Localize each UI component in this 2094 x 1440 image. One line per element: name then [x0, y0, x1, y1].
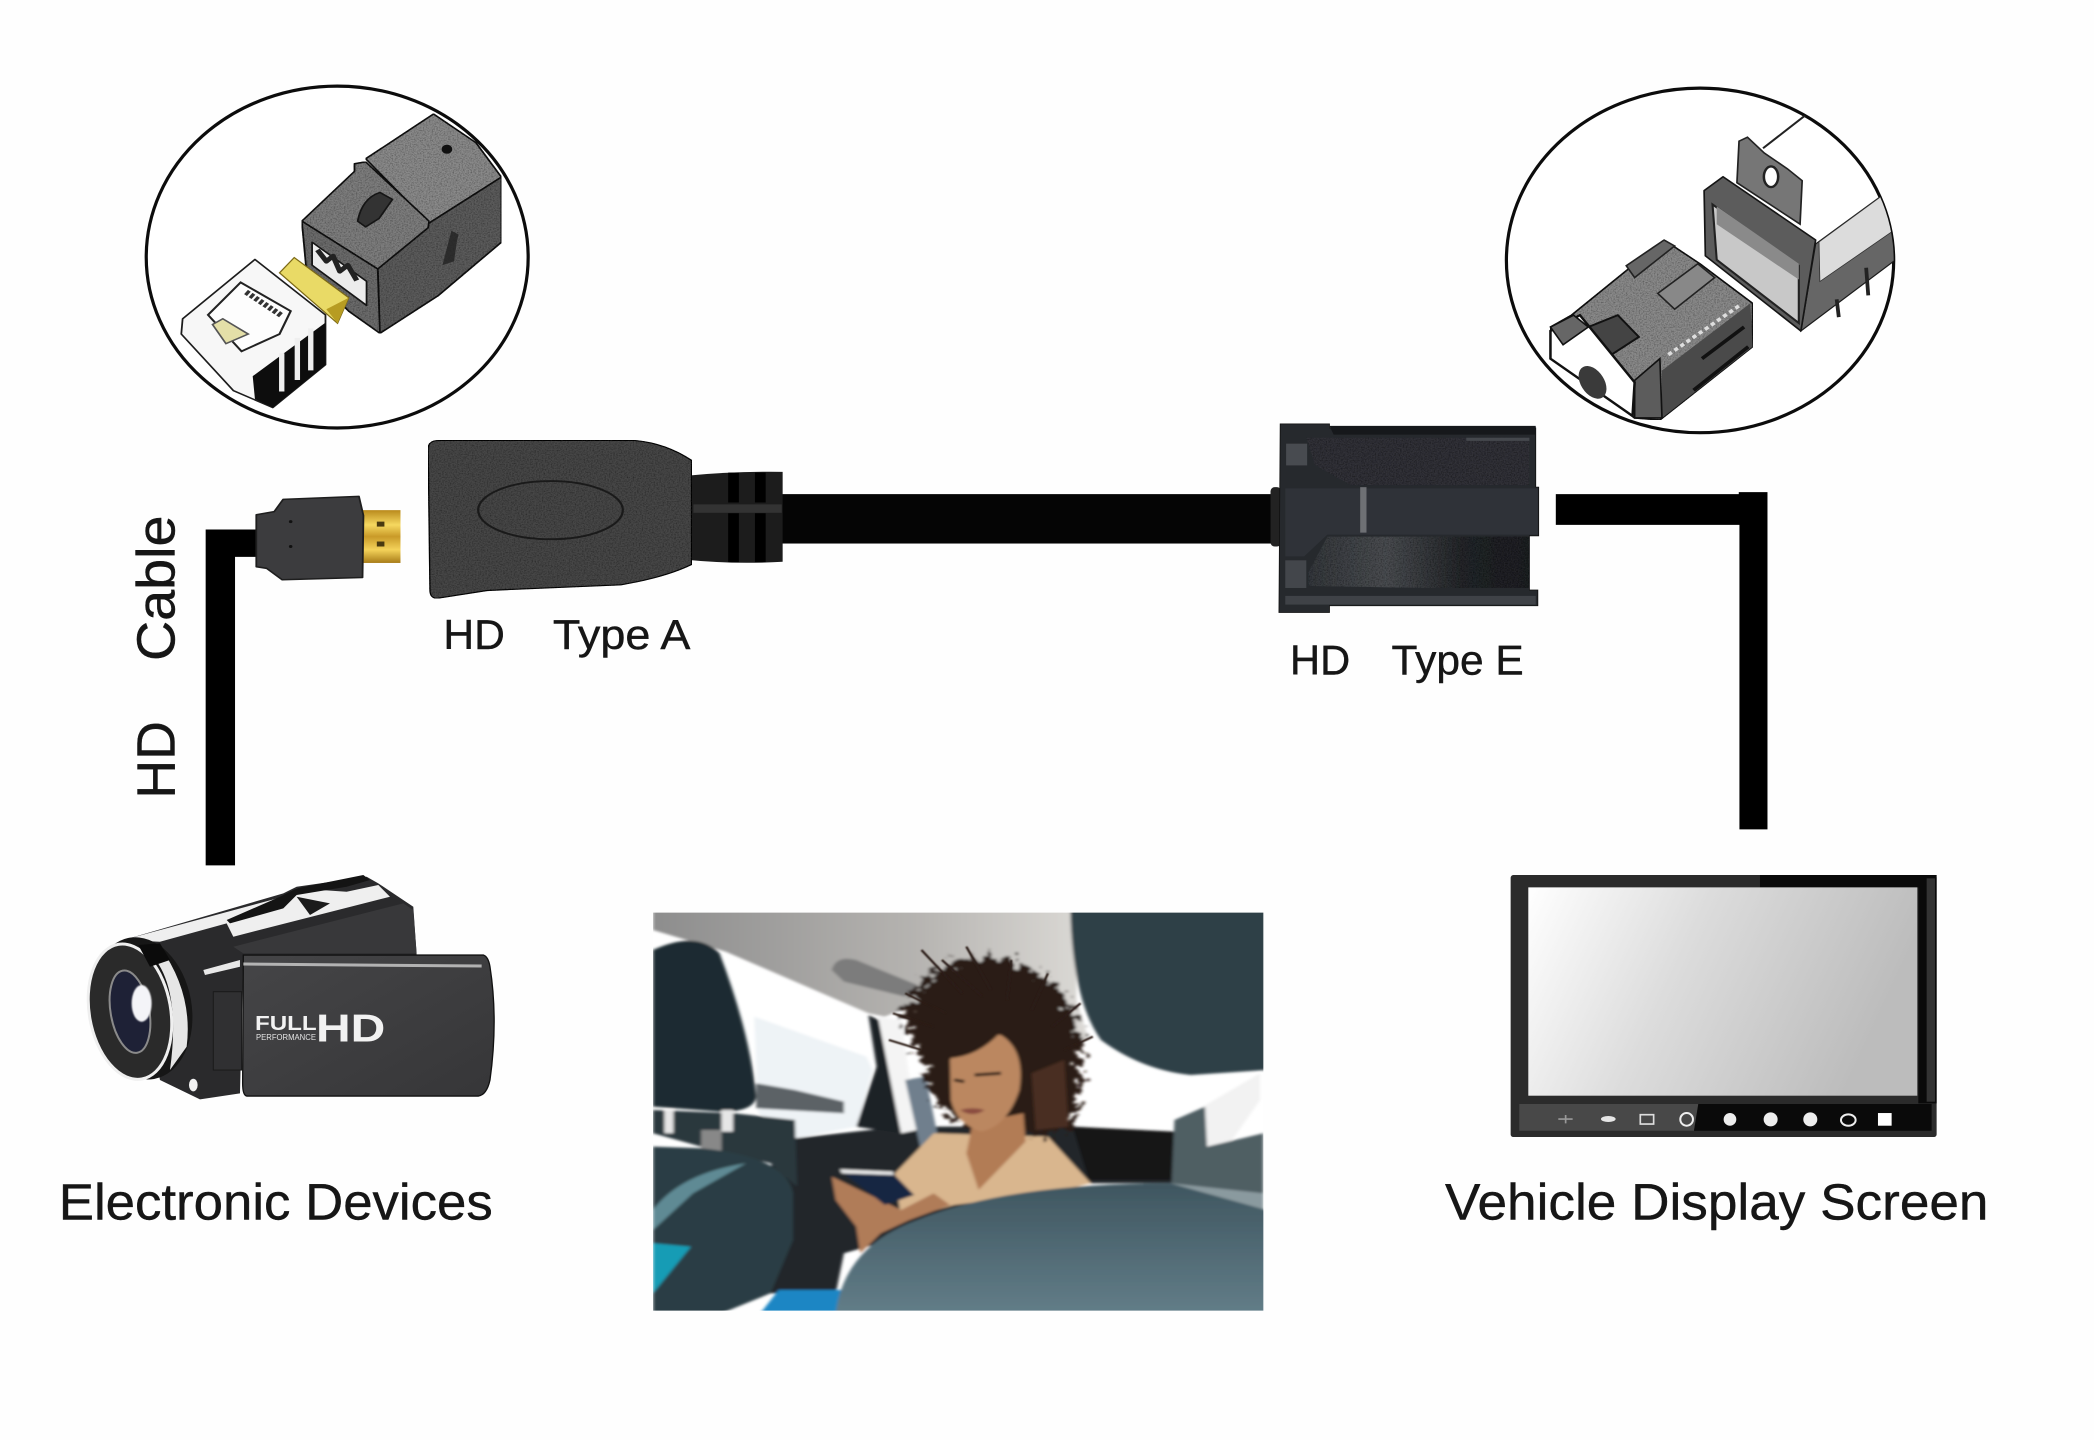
- center bar: [1285, 488, 1538, 556]
- label: HD Cable (vertical): Cable: [127, 515, 186, 661]
- ceiling: [653, 910, 1089, 1043]
- FULL HD badge: HD: [316, 1007, 385, 1051]
- label: HD Cable (vertical): [127, 515, 186, 799]
- label: Vehicle Display Screen: Vehicle Display Screen: [1445, 1173, 1988, 1230]
- left seat back: [653, 1147, 793, 1313]
- gold plug tongue: [279, 258, 349, 323]
- screen: [1528, 887, 1917, 1096]
- neck and chest: [966, 1113, 1025, 1190]
- plug body: [1550, 240, 1753, 420]
- window tint: [754, 1017, 873, 1138]
- front seat: [836, 1183, 1266, 1313]
- face: [950, 1035, 1021, 1132]
- seat belt: [904, 1075, 940, 1148]
- cable: main black cable: [775, 494, 1285, 544]
- label: HD Type E: HD: [1290, 637, 1350, 683]
- headrest posts: [653, 1110, 797, 1187]
- cable: left L-shaped black line: [206, 530, 262, 865]
- shirt: [895, 1133, 1091, 1220]
- metal tab with hole: [1737, 137, 1802, 224]
- corner blocks: [1286, 444, 1307, 465]
- label: HD Type A: [443, 611, 690, 658]
- circle detail: HD Type A connector: [146, 86, 528, 428]
- cable: right L-shaped black line: [1556, 492, 1767, 829]
- arms and hands: [832, 1177, 950, 1253]
- thin wire: [1763, 115, 1805, 148]
- flip screen panel: [243, 955, 494, 1096]
- label: Electronic Devices: Electronic Devices: [59, 1173, 493, 1230]
- vehicle display monitor: [1511, 875, 1937, 1137]
- control bar: [1519, 1104, 1932, 1131]
- HD Type E connector: [1271, 424, 1539, 613]
- hair strands: [889, 947, 1093, 1050]
- upper panel: [1306, 438, 1529, 485]
- label: HD Cable (vertical): HD: [127, 721, 186, 799]
- strain relief: [688, 472, 783, 563]
- label: HD Type A: HD: [443, 611, 505, 658]
- phone: [842, 1172, 914, 1205]
- cable collar: [1271, 487, 1281, 546]
- top body: [123, 877, 417, 1099]
- label: HD Type E: Type E: [1392, 637, 1524, 683]
- female socket housing: [302, 114, 501, 333]
- label: HD Type A: Type A: [553, 611, 690, 658]
- housing outline: [1279, 424, 1539, 613]
- HD Type A socket connector: [428, 440, 783, 598]
- label: HD Type E: [1290, 637, 1524, 683]
- gold contact: [363, 510, 400, 563]
- camcorder: Electronic Devices icon: [78, 875, 494, 1099]
- hair: [901, 957, 1081, 1133]
- circle detail: HD Type E connector: [1506, 88, 1900, 433]
- photo: woman using phone in car back seat: [653, 910, 1266, 1313]
- FULL HD badge: PERFORMANCE: [256, 1033, 316, 1042]
- right rear post highlight: [1203, 1073, 1260, 1150]
- white plug body: [181, 259, 325, 408]
- grab handle: [832, 959, 917, 997]
- left headrest: [653, 941, 756, 1112]
- door and rear interior: [771, 1127, 1174, 1293]
- jeans: [760, 1288, 843, 1311]
- right side socket body: [1801, 189, 1900, 331]
- FULL HD badge: [255, 1007, 385, 1051]
- lower panel: [1308, 537, 1529, 588]
- oval logo recess: [478, 481, 623, 539]
- socket frame: [1704, 177, 1816, 331]
- right dark headrest: [1070, 910, 1266, 1075]
- body: [428, 440, 692, 598]
- HDMI plug: [256, 496, 400, 580]
- lens: [78, 929, 203, 1088]
- plug housing: [256, 496, 363, 580]
- FULL HD badge: FULL: [255, 1012, 317, 1035]
